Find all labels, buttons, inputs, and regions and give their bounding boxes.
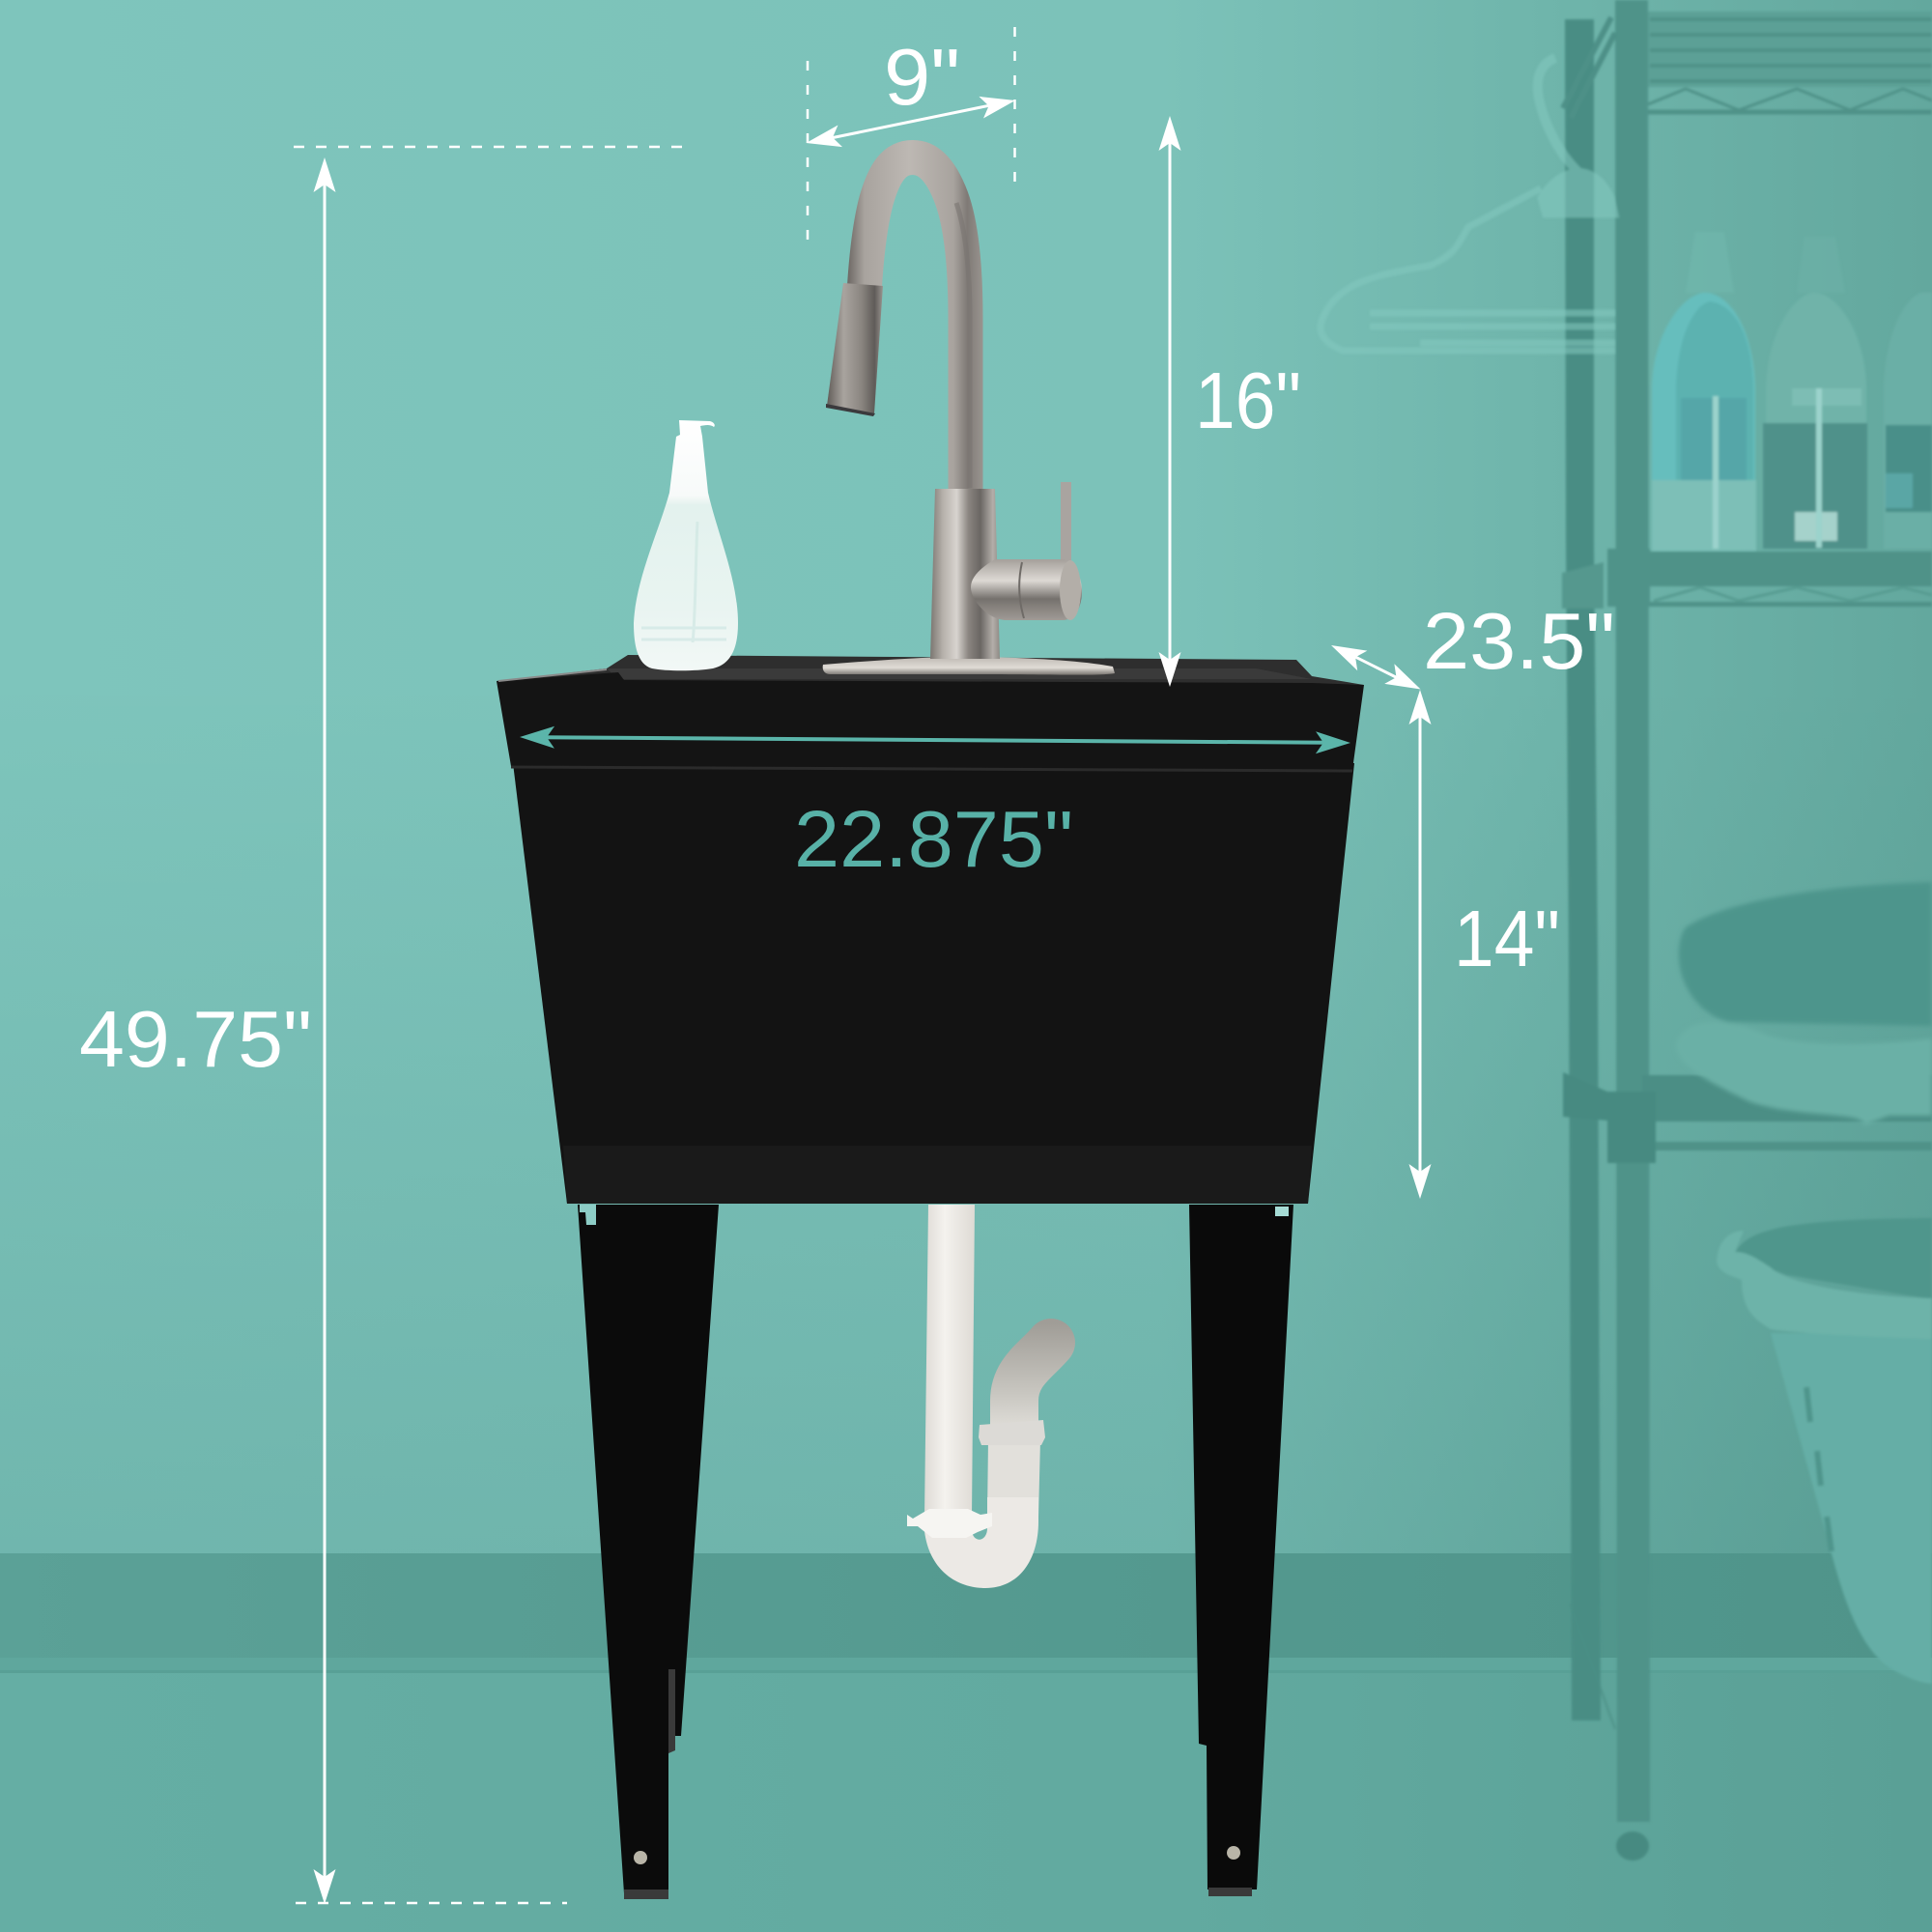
tub: front rim [497,672,1364,770]
faucet: pull-down spray head [827,283,883,413]
dimension: faucet height 16 inches [1159,116,1301,687]
bottle: dark label [1763,237,1867,549]
label: 9: 9" [884,32,960,122]
arrow: basin height [1408,690,1432,1199]
sink leg: right [1189,1205,1293,1896]
rack: back post [1565,19,1601,1720]
dimension: spout reach 9 inches [804,27,1017,240]
leg: body [1189,1205,1293,1889]
dimension: basin height 14 inches [1408,690,1560,1199]
background: wire shelving rack [1562,0,1932,1861]
faucet: mixer handle [971,559,1082,620]
sink tub [497,655,1364,1204]
faucet: spray nozzle [826,404,875,416]
pipe: vertical section [987,1439,1040,1517]
leg: rubber foot [624,1889,668,1899]
pipe: tailpiece [924,1205,975,1517]
tub: back deck [497,655,1364,685]
dimension: overall height 49.75 inches [79,147,682,1904]
guide lines [294,147,682,1903]
faucet: lever rod [1061,482,1071,563]
dimension: depth 23.5 inches [1326,596,1615,699]
rack: lower shelf [1563,1072,1932,1163]
rack: bottom shelf wire [1570,1604,1615,1729]
tub: rim edge [511,767,1352,771]
label: 49.75: 49.75" [79,994,312,1084]
soap dispenser bottle [634,420,738,670]
tub: rim highlight [498,669,607,681]
rack: front post [1615,0,1650,1822]
basket: inner dark shadow [1734,1218,1932,1299]
faucet [823,157,1115,675]
guide lines [808,27,1014,240]
faucet: deck plate [823,657,1115,675]
towel: dark [1679,882,1932,1026]
towel: light [1676,1022,1932,1125]
rack: top shelf [1563,12,1932,118]
drain pipe: P-trap [907,1205,1051,1588]
tub: bottom band [563,1146,1312,1204]
basket: body [1771,1333,1932,1684]
tub: basin body [513,763,1354,1204]
basket: rim [1717,1231,1932,1339]
pipe: lower slip nut [907,1509,992,1538]
background: laundry basket [1717,1218,1932,1684]
pipe: outlet bend [1014,1343,1051,1430]
faucet: handle end cap [1060,560,1081,620]
leg: rubber foot [1208,1888,1252,1896]
label: 16: 16" [1195,355,1301,445]
leg: rivet [634,1851,647,1864]
rack: foot [1616,1832,1649,1861]
arrow: width [520,726,1350,753]
rack: middle shelf [1562,549,1932,609]
pipe: upper slip nut [979,1420,1045,1445]
bottle: blue [1652,232,1756,551]
faucet: base column [930,489,1000,659]
sink leg: left [578,1205,719,1899]
tub: deck shelf highlight [607,668,1312,679]
leg: rivet [1227,1846,1240,1860]
bottle: third [1884,293,1932,549]
arrow: faucet height [1159,116,1180,687]
leg: inner foot strip [668,1669,675,1753]
basket: slots [1806,1387,1832,1551]
label: 23.5: 23.5" [1423,596,1615,686]
leg: bracket [1275,1207,1289,1216]
soap: inner label reflections [641,522,726,642]
faucet: handle joint [1019,562,1024,618]
faucet: gooseneck [865,157,966,493]
label: 14: 14" [1454,894,1560,983]
faucet: gooseneck shadow stripe [956,203,970,488]
background: detergent bottles [1652,232,1932,551]
background: folded towels [1676,882,1932,1125]
pipe: U-bend [924,1497,1038,1588]
label: 22.875: 22.875" [794,794,1073,884]
arrow: reach [804,90,1017,154]
leg: body [578,1205,719,1893]
dimension: width 22.875 inches [520,726,1350,884]
arrow: height [313,157,336,1904]
leg: bracket [580,1205,596,1225]
arrow: depth [1326,636,1426,699]
background: clothes hangers [1321,58,1615,351]
